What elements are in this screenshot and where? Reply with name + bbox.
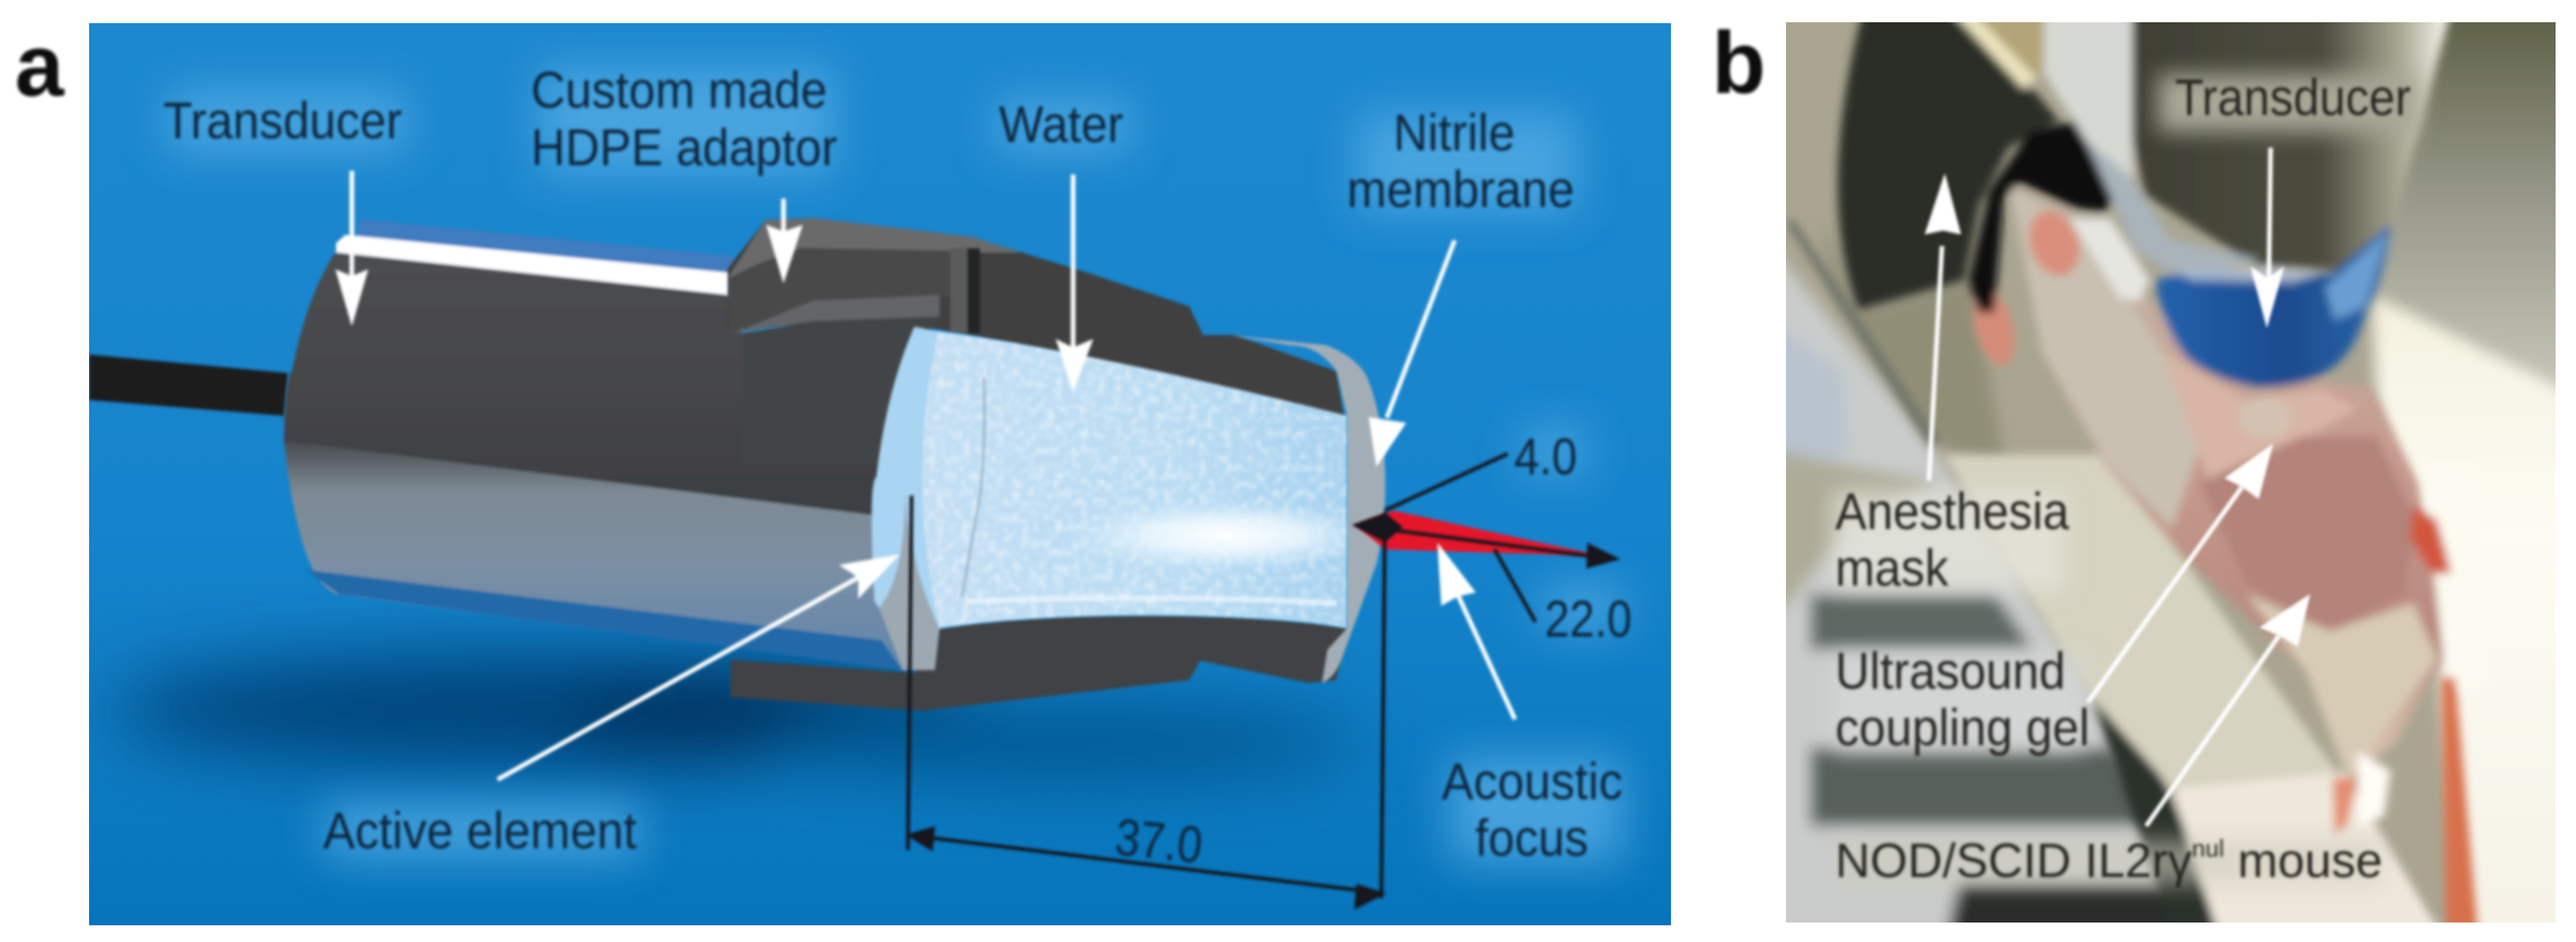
pale wall strip (2044, 9, 2132, 195)
adaptor top face (728, 218, 1021, 278)
adaptor groove (951, 248, 967, 333)
label: membrane: membrane (1347, 160, 1574, 218)
photo base (1786, 22, 2556, 923)
active element rim (872, 327, 939, 670)
dark band upper (1810, 594, 2033, 650)
water texture (914, 325, 1383, 631)
label: focus: focus (1475, 808, 1588, 867)
adaptor front face (728, 248, 951, 332)
label: mouse strain: mouse (2224, 834, 2383, 888)
brass strip (1949, 9, 2037, 89)
dimension: 37.0: 37.0 (1112, 807, 1205, 874)
label: Active element: Active element (323, 801, 637, 859)
foot glare (2358, 752, 2390, 826)
metal rail (1786, 219, 1940, 445)
label: mouse strain: NOD/SCID IL2rγ (1835, 834, 2192, 888)
mouse body (2010, 186, 2443, 780)
mask dark hood (1969, 121, 2115, 313)
body under adaptor (743, 318, 934, 336)
towel (2372, 295, 2576, 942)
label: Custom made: Custom made (531, 60, 827, 119)
adaptor highlight (732, 295, 939, 333)
blue top strip (356, 219, 735, 275)
water volume (922, 331, 1347, 628)
hind foot (2333, 778, 2358, 835)
label: HDPE adaptor: HDPE adaptor (531, 118, 837, 176)
device shadow (111, 652, 1365, 780)
white tape patch (2069, 218, 2150, 301)
panel a: transducer diagram (89, 23, 1671, 925)
gel (2239, 397, 2291, 438)
photo label halos (1833, 74, 2418, 884)
blue cap (2155, 224, 2391, 387)
nitrile membrane (1228, 335, 1385, 683)
tan floor under chamber (1819, 213, 2005, 464)
label: b: b (1712, 14, 1766, 112)
label: mouse strain: nul (2192, 834, 2224, 862)
white highlight strip (336, 235, 730, 295)
lower-left light panel (1745, 213, 2246, 942)
rim grey section (879, 492, 939, 670)
cream plate band (1944, 455, 2339, 789)
tail (2441, 677, 2480, 942)
cap folds (2325, 232, 2388, 320)
right olive wall (2372, 0, 2576, 455)
blue lower reflection (305, 570, 902, 670)
panel b: photograph of setup (1745, 0, 2576, 942)
pink mid fur (2163, 353, 2358, 483)
dimension: 4.0: 4.0 (1514, 427, 1577, 485)
panel a background (89, 23, 1671, 925)
clear tape (2085, 138, 2260, 278)
label: Transducer: Transducer (163, 91, 402, 149)
near ear (2020, 203, 2089, 283)
cap wrinkle (2177, 267, 2321, 283)
label: Transducer: Transducer (2175, 68, 2411, 126)
red hind paw (2410, 506, 2452, 574)
adaptor groove shadow (967, 248, 980, 333)
dark chamber (1838, 9, 2059, 310)
label: coupling gel: coupling gel (1835, 698, 2090, 756)
label halos (167, 65, 1625, 863)
dark wedge edge (2090, 691, 2231, 928)
photo callout arrows (1925, 148, 2310, 826)
white callout arrows (336, 171, 1515, 780)
far ear (1966, 284, 2022, 369)
cable (89, 355, 288, 416)
label: Acoustic: Acoustic (1442, 752, 1623, 810)
label: a: a (15, 17, 65, 115)
panel a labels (163, 60, 1632, 874)
label: mask: mask (1835, 538, 1949, 597)
panel b labels (1835, 68, 2411, 888)
lower metallic band (284, 441, 905, 670)
label: Ultrasound: Ultrasound (1835, 641, 2065, 700)
dark housing (284, 252, 928, 520)
tan metal top (1970, 9, 2044, 79)
white glare on flank (2423, 464, 2488, 687)
transducer column (2132, 9, 2451, 271)
bottom dark (1940, 882, 2256, 942)
tan left edge (1745, 445, 1940, 650)
label: Nitrile: Nitrile (1393, 103, 1515, 161)
HDPE adaptor (728, 218, 1348, 711)
dimension: 22.0: 22.0 (1545, 589, 1632, 648)
dimension lines (908, 454, 1615, 907)
upper adaptor body (728, 218, 1347, 436)
label: Water: Water (999, 95, 1123, 153)
label: Anesthesia: Anesthesia (1835, 482, 2070, 540)
photo background shapes (1745, 0, 2576, 942)
acoustic focus cone (1356, 510, 1601, 556)
water chamber (872, 325, 1383, 670)
red-brown fur (2200, 436, 2415, 631)
lower tan fur (2246, 594, 2437, 780)
transducer housing (284, 219, 928, 670)
pale shoulder fur (2010, 186, 2200, 529)
white plate section (2172, 772, 2460, 942)
bluish reflection (1745, 306, 1847, 483)
lower adaptor body (731, 615, 1348, 711)
dark band lower (1810, 747, 2172, 826)
